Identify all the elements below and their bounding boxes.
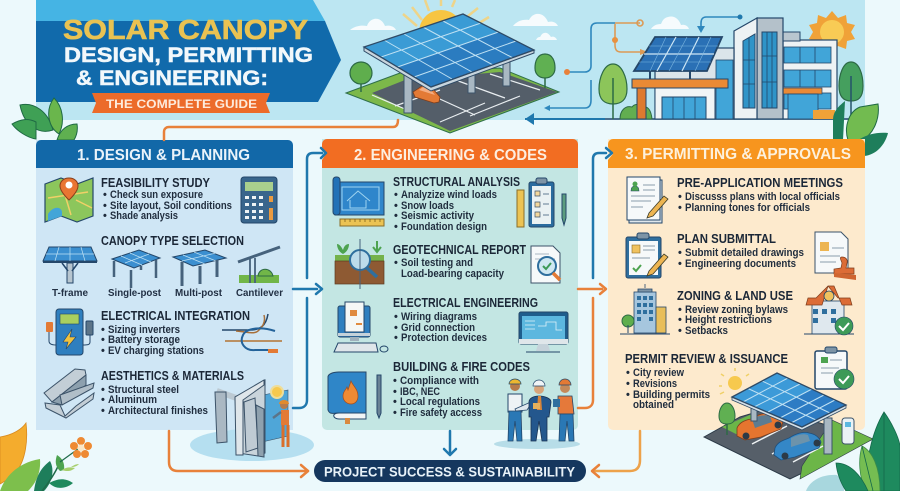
text: electrical engineering: ELECTRICAL ENGINEERING <box>393 295 538 310</box>
panel 2: engineering and codes <box>322 139 578 430</box>
engineer in vest <box>553 379 574 441</box>
text: pre-application meetings: • <box>678 191 682 203</box>
icon: report with magnifier <box>531 246 560 283</box>
leaves and flower: bottom left <box>0 423 92 491</box>
text: structural analysis: Snow loads <box>401 200 454 212</box>
text: feasibility study <box>101 175 232 222</box>
panel <box>364 14 534 91</box>
panel 1 header <box>36 140 293 168</box>
icon: map with pin <box>45 178 93 222</box>
icon: computer with wiring <box>334 302 388 352</box>
shrubs <box>620 104 652 119</box>
heading: canopy type selection: CANOPY TYPE SELECTION <box>101 233 244 248</box>
text: aesthetics and materials <box>101 368 244 417</box>
title: engineering: & ENGINEERING: <box>76 67 268 90</box>
text: building and fire codes: • <box>393 396 397 408</box>
text: aesthetics and materials: AESTHETICS & MATERIALS <box>101 368 244 383</box>
text: structural analysis: Analyzize wind loads <box>401 189 497 201</box>
text: aesthetics and materials: Aluminum <box>108 394 157 406</box>
icon: blueprint and ruler <box>333 177 384 226</box>
text: building and fire codes <box>393 359 530 419</box>
left tree <box>599 64 627 119</box>
illustration: office building <box>599 11 863 119</box>
text: zoning and land use: • <box>678 304 682 316</box>
text: structural analysis: Foundation design <box>401 221 487 233</box>
worker <box>273 400 289 447</box>
icon: monitor <box>519 312 568 352</box>
leaves: top left <box>12 98 77 140</box>
text: geotechnical report: • <box>394 257 398 269</box>
text: building and fire codes: IBC, NEC <box>400 386 440 398</box>
sky band <box>36 0 865 120</box>
leaves: top right <box>833 101 888 156</box>
text: electrical integration: Sizing inverters <box>108 324 180 336</box>
text: aesthetics and materials: • <box>101 384 105 396</box>
text: feasibility study: Check sun exposure <box>110 189 203 201</box>
roof solar panel <box>634 37 722 79</box>
text: permit review and issuance: Building permits <box>633 389 710 401</box>
car <box>413 86 440 103</box>
posts <box>404 62 510 113</box>
leaves: bottom right <box>806 412 900 491</box>
text: feasibility study: Shade analysis <box>110 210 178 222</box>
text: aesthetics and materials: Structural steel <box>108 384 179 396</box>
text: plan submittal: Submit detailed drawings <box>685 247 804 259</box>
text: geotechnical report <box>393 242 526 280</box>
icon: calculator <box>241 177 277 223</box>
panel <box>732 373 846 430</box>
text: electrical integration: • <box>101 324 105 336</box>
text: electrical integration: Battery storage <box>108 334 180 346</box>
engineer in suit <box>529 380 551 441</box>
text: pre-application meetings: PRE-APPLICATION MEETINGS <box>677 175 843 190</box>
text: feasibility study: FEASIBILITY STUDY <box>101 175 210 190</box>
text: structural analysis: • <box>394 200 398 212</box>
text: building and fire codes: Fire safety access <box>400 407 482 419</box>
text: feasibility study: • <box>103 189 107 201</box>
text: building and fire codes: Local regulations <box>400 396 480 408</box>
sun <box>809 11 855 53</box>
canopy type: cantilever: Cantilever <box>236 287 283 299</box>
arrow: banner to panels <box>164 120 398 140</box>
blue car <box>774 432 821 460</box>
text: structural analysis: • <box>394 210 398 222</box>
text: electrical engineering <box>393 295 538 344</box>
orange canopy <box>632 79 728 119</box>
text: electrical engineering: • <box>394 332 398 344</box>
text: electrical integration <box>101 308 250 357</box>
orange car <box>737 413 783 440</box>
sun <box>719 368 749 394</box>
text: zoning and land use: • <box>678 314 682 326</box>
text: permit review and issuance: Revisions <box>633 378 677 390</box>
icon: soil section with magnifier <box>335 239 384 289</box>
text: plan submittal: • <box>678 258 682 270</box>
canopy type: t-frame: T-frame <box>52 287 88 299</box>
text: geotechnical report: GEOTECHNICAL REPORT <box>393 242 526 257</box>
sun <box>271 386 283 398</box>
tree left of carport <box>350 62 372 92</box>
icon: plan clipboard <box>626 233 668 278</box>
right wing <box>783 32 837 119</box>
text: plan submittal: • <box>678 247 682 259</box>
text: aesthetics and materials: • <box>101 405 105 417</box>
connector: panel 2 to panel 3 <box>578 148 612 408</box>
text: geotechnical report: Load-bearing capacity <box>401 268 505 280</box>
right tree <box>839 62 863 118</box>
carport ground <box>346 68 559 133</box>
footer: project success: PROJECT SUCCESS & SUSTAINABILITY <box>324 464 576 480</box>
canopy type: single-post <box>108 250 161 299</box>
illustration: solar carport top <box>346 0 559 133</box>
text: plan submittal: PLAN SUBMITTAL <box>677 231 776 246</box>
text: electrical engineering: • <box>394 322 398 334</box>
text: zoning and land use: Review zoning bylaws <box>685 304 788 316</box>
icon: application document <box>627 177 668 223</box>
clouds <box>350 14 689 40</box>
text: electrical integration: • <box>101 345 105 357</box>
text: feasibility study: • <box>103 210 107 222</box>
icon: town hall approved <box>804 286 854 335</box>
canopy type: cantilever <box>236 247 283 299</box>
text: feasibility study: Site layout, Soil conditions <box>110 200 232 212</box>
text: pre-application meetings <box>677 175 843 214</box>
title banner <box>36 0 341 113</box>
text: zoning and land use: • <box>678 325 682 337</box>
text: permit review and issuance: • <box>626 378 630 390</box>
panel 2 header: 2. ENGINEERING & CODES <box>354 147 547 164</box>
icon: approved checklist <box>815 347 854 389</box>
illustration: three engineers <box>494 379 580 449</box>
text: building and fire codes: BUILDING & FIRE CODES <box>393 359 530 374</box>
engineer with laptop <box>508 379 533 441</box>
text: electrical integration: • <box>101 334 105 346</box>
tree right of carport <box>535 54 555 88</box>
footer: project success <box>314 460 586 482</box>
ground <box>704 408 873 479</box>
canopy type: single-post: Single-post <box>108 287 161 299</box>
text: electrical engineering: Protection devices <box>401 332 487 344</box>
text: feasibility study: • <box>103 200 107 212</box>
panel 1: design and planning <box>36 140 293 430</box>
text: electrical integration: EV charging stations <box>108 345 204 357</box>
canopy type: multi-post <box>173 250 226 299</box>
text: building and fire codes: • <box>393 375 397 387</box>
posts <box>751 406 832 454</box>
icon: clipboard, ruler, pen <box>517 178 566 227</box>
text: permit review and issuance: • <box>626 389 630 401</box>
text: permit review and issuance <box>625 351 788 411</box>
panel 2 header <box>322 139 578 168</box>
arrow: panel 2 to footer <box>444 431 456 455</box>
panel 3 header <box>608 139 865 168</box>
connector lines between carport and building <box>544 14 742 111</box>
icon: cables <box>222 314 282 351</box>
arrow from building to carport <box>525 113 860 125</box>
text: plan submittal <box>677 231 804 270</box>
panel 3: permitting and approvals <box>608 139 865 430</box>
title: design, permitting: DESIGN, PERMITTING <box>64 44 313 67</box>
text: zoning and land use <box>677 288 793 337</box>
icon: city buildings with tree <box>620 284 670 334</box>
text: aesthetics and materials: Architectural finishes <box>108 405 208 417</box>
icon: document with stamp <box>815 232 856 280</box>
text: electrical integration: ELECTRICAL INTEGRATION <box>101 308 250 323</box>
ribbon: the complete guide: THE COMPLETE GUIDE <box>106 97 257 111</box>
illustration: steel frame with worker <box>190 380 314 461</box>
connector: panel 1 to panel 2 <box>293 148 326 408</box>
text: structural analysis: STRUCTURAL ANALYSIS <box>393 174 520 189</box>
text: permit review and issuance: City review <box>633 367 684 379</box>
icon: code book and pen <box>328 372 381 424</box>
tower <box>734 18 783 119</box>
text: structural analysis: Seismic activity <box>401 210 475 222</box>
panel 1 header: 1. DESIGN & PLANNING <box>77 147 250 164</box>
EV charger <box>842 418 854 444</box>
text: zoning and land use: ZONING & LAND USE <box>677 288 793 303</box>
tree <box>719 403 735 435</box>
sun behind canopy <box>403 0 489 54</box>
text: pre-application meetings: Planning tones for officials <box>685 202 810 214</box>
text: permit review and issuance: PERMIT REVIEW & ISSUANCE <box>625 351 788 366</box>
text: building and fire codes: • <box>393 407 397 419</box>
text: electrical engineering: Grid connection <box>401 322 475 334</box>
canopy type: t-frame <box>43 247 97 299</box>
icon: charger meter <box>46 309 93 355</box>
text: permit review and issuance: • <box>626 367 630 379</box>
arrow: panel 1 to footer <box>169 431 308 477</box>
canopy type: multi-post: Multi-post <box>175 287 222 299</box>
illustration: solar carport with EV cars <box>704 368 873 479</box>
text: structural analysis: • <box>394 189 398 201</box>
text: plan submittal: Engineering documents <box>685 258 796 270</box>
low block <box>655 48 734 119</box>
text: electrical engineering: Wiring diagrams <box>401 311 477 323</box>
icon: steel beams <box>44 369 94 418</box>
text: building and fire codes: Compliance with <box>400 375 479 387</box>
text: electrical engineering: • <box>394 311 398 323</box>
text: building and fire codes: • <box>393 386 397 398</box>
ribbon: the complete guide <box>92 93 270 113</box>
text: structural analysis: • <box>394 221 398 233</box>
text: aesthetics and materials: • <box>101 394 105 406</box>
text: permit review and issuance: obtained <box>633 399 674 411</box>
text: geotechnical report: Soil testing and <box>401 257 473 269</box>
text: zoning and land use: Setbacks <box>685 325 728 337</box>
arrow: panel 3 to footer <box>592 431 640 477</box>
text: pre-application meetings: Discusss plans with local officials <box>685 191 840 203</box>
text: zoning and land use: Height restrictions <box>685 314 772 326</box>
title: solar canopy: SOLAR CANOPY <box>63 14 308 45</box>
panel 3 header: 3. PERMITTING & APPROVALS <box>625 146 851 163</box>
text: pre-application meetings: • <box>678 202 682 214</box>
text: structural analysis <box>393 174 520 233</box>
